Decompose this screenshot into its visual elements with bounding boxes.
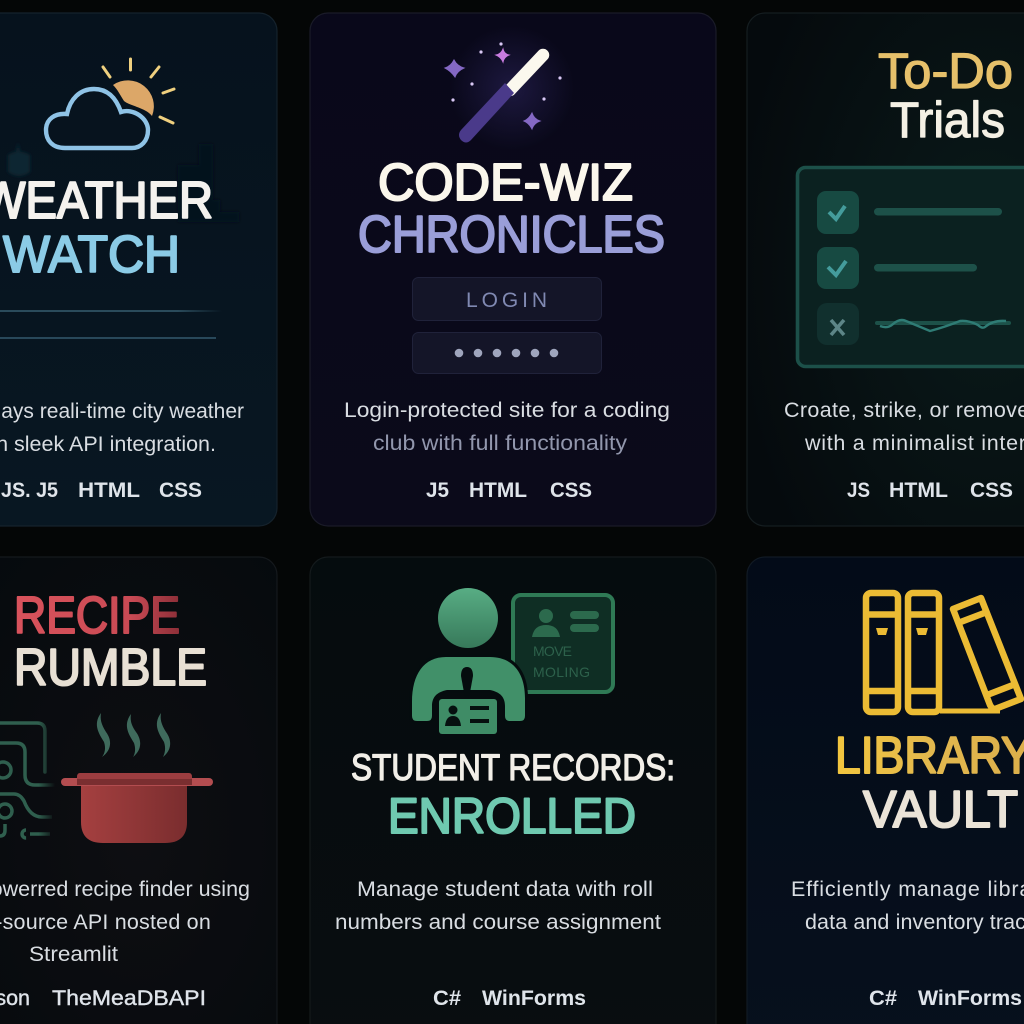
checked item two [817,247,977,289]
shelf [940,708,1000,714]
record card: MOVE [533,643,572,659]
tech tags: HTML [78,478,140,502]
input lines [0,310,222,339]
card surface [0,13,277,526]
tech tags [433,986,586,1010]
card surface [747,13,1024,526]
checklist panel [798,168,1024,366]
heading: Weather Watch: WATCH [3,226,180,284]
tech tags [0,986,206,1010]
description: numbers and course assignment [335,910,661,934]
description [791,877,1024,934]
faint background silhouettes [8,142,239,222]
heading: Code-Wiz Chronicles: CODE-WIZ [378,154,633,212]
record card: MOLING [533,664,590,680]
tech tags [426,478,592,502]
book two [908,593,939,712]
heading: Code-Wiz Chronicles: CHRONICLES [358,206,665,264]
checked item one [817,191,1002,234]
heading: To-Do Trials [878,43,1013,148]
tech tags: J5 [426,478,449,502]
description: Login-protected site for a coding [344,398,670,422]
icon: books on shelf [866,593,1021,712]
description [784,398,1024,455]
icon: magic wand [445,26,574,150]
login field [412,278,602,320]
heading: Library Vault: VAULT [863,781,1018,839]
circuit decoration [0,723,55,838]
tech tags [1,478,202,502]
description [0,877,250,966]
tech tags: CSS [159,478,202,502]
icon: student with ID card [412,588,613,734]
tech tags: C# [869,986,897,1010]
panel: Library Vault [747,557,1024,1024]
heading: Code-Wiz Chronicles [358,154,665,264]
card surface [747,557,1024,1024]
tech tags: HTML [889,478,948,502]
book one [866,593,898,712]
heading: Student Records Enrolled [351,747,675,844]
heading: Library Vault [835,727,1024,839]
heading: Weather Watch [0,172,213,284]
tech tags: TheMeaDBAPI [52,986,206,1010]
tech tags: CSS [550,478,592,502]
login field: LOGIN [466,289,547,312]
heading: Student Records Enrolled: STUDENT RECORDS: [351,747,675,788]
tech tags: WinForms [482,986,586,1010]
description [344,398,670,455]
panel: Recipe Rumble [0,557,277,1024]
book three [953,598,1021,709]
tech tags [847,478,1013,502]
panel: Weather Watch [0,13,277,526]
card surface [310,13,716,526]
tech tags: C# [433,986,461,1010]
panel: Code-Wiz Chronicles [310,13,716,526]
tech tags: WinForms [918,986,1022,1010]
card surface [310,557,716,1024]
heading: Recipe Rumble: RUMBLE [14,639,207,697]
struck item [817,303,1011,345]
tech tags [869,986,1022,1010]
heading: To-Do Trials: To-Do [878,43,1013,99]
tech tags: JS [847,478,870,502]
password field [412,332,602,374]
heading: Recipe Rumble: RECIPE [14,587,180,645]
description [335,877,661,934]
tech tags: CSS [970,478,1013,502]
heading: To-Do Trials: Trials [890,92,1005,148]
description [0,400,244,456]
heading: Student Records Enrolled: ENROLLED [388,788,636,844]
tech tags: JS. J5 [1,478,58,502]
heading: Recipe Rumble [14,587,207,697]
record card [513,595,613,692]
description: Streamlit [29,942,118,966]
panel: To-Do Trials [747,13,1024,526]
description: Manage student data with roll [357,877,653,901]
icon: sun and cloud [46,59,174,148]
tech tags: HTML [469,478,527,502]
icon: cooking pot with steam [61,713,213,843]
description: club with full functionality [373,431,627,455]
card surface [0,557,277,1024]
panel: Student Records Enrolled [310,557,716,1024]
